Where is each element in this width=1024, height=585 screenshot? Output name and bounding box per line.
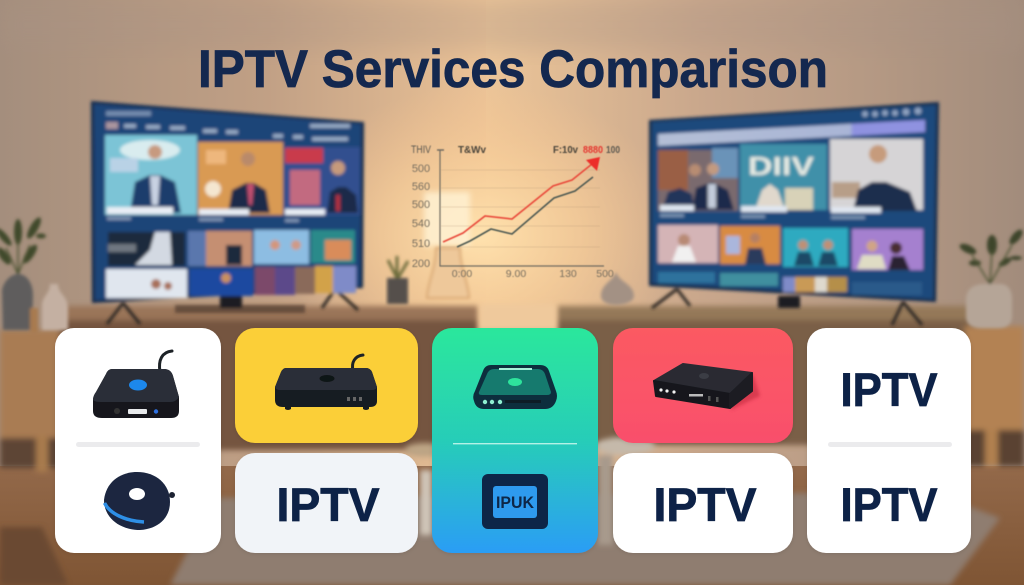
chart x axis labels: 500 bbox=[596, 268, 614, 280]
chart x axis labels: 9.00 bbox=[506, 268, 526, 280]
right plant and vase bbox=[958, 228, 1024, 328]
chart header labels: T&Wv bbox=[458, 144, 486, 156]
tv top icons bbox=[862, 108, 922, 117]
chart y axis labels: 200 bbox=[412, 258, 430, 270]
chart x axis labels: 130 bbox=[559, 268, 577, 280]
chart y axis labels: 500 bbox=[412, 199, 430, 211]
coffee table items bbox=[405, 437, 655, 545]
icon: IPUK logo: IPUK bbox=[496, 493, 535, 512]
icon: IPUK logo bbox=[482, 474, 548, 529]
card 3: green-blue gradient bbox=[432, 328, 598, 553]
chair lower left bbox=[0, 527, 68, 585]
card 5: white with two IPTV logos: IPTV bbox=[840, 363, 938, 416]
tv thumbnail row 2 bbox=[108, 230, 355, 266]
tv menu bar bbox=[106, 111, 350, 141]
tv thumbnail row 1 bbox=[105, 135, 360, 215]
card 2b: IPTV logo bbox=[235, 453, 418, 553]
chart header labels: F:10v bbox=[553, 144, 578, 156]
divider bbox=[453, 443, 577, 444]
chart x axis labels: 0:00 bbox=[452, 268, 472, 280]
center plant bbox=[387, 256, 408, 304]
sideboard right bbox=[557, 306, 1024, 466]
tv screen lettering: DIIV bbox=[748, 151, 815, 181]
chart y axis labels: 500 bbox=[412, 163, 430, 175]
divider bbox=[76, 442, 200, 447]
line chart bbox=[411, 144, 620, 280]
tv thumbnail row 2 bbox=[658, 225, 923, 270]
card 5: white with two IPTV logos: IPTV bbox=[840, 478, 938, 531]
left plant and vases bbox=[0, 216, 68, 333]
tv thumbnail row 3 bbox=[106, 266, 356, 298]
tv thumbnail row 3 bbox=[658, 272, 922, 295]
lamp shade glow bbox=[424, 192, 470, 246]
tv thumbnail row 1 bbox=[658, 139, 923, 211]
dark trend line bbox=[457, 177, 593, 247]
card 2b: IPTV logo: IPTV bbox=[276, 478, 380, 531]
icon: black box with blue dot bbox=[93, 351, 179, 418]
chart header labels: 8880 bbox=[583, 144, 603, 156]
tv: left bbox=[91, 101, 364, 324]
chart header labels bbox=[458, 144, 620, 156]
lamp base bbox=[427, 248, 469, 298]
divider bbox=[828, 442, 952, 447]
tv: right bbox=[649, 102, 939, 325]
icon: round puck device bbox=[104, 472, 175, 530]
icon: black isometric box bbox=[654, 364, 760, 410]
chart x axis labels bbox=[452, 268, 614, 280]
chart gridlines and axes bbox=[437, 150, 604, 266]
card 4b: IPTV logo bbox=[613, 453, 793, 553]
tv captions bbox=[107, 207, 325, 222]
chart y axis labels: THIV bbox=[411, 144, 432, 156]
sideboard left bbox=[0, 306, 478, 472]
chart y axis labels: 540 bbox=[412, 218, 430, 230]
tv search bar bbox=[658, 120, 925, 146]
chart y axis labels bbox=[411, 144, 432, 270]
card 4: red with device bbox=[613, 328, 793, 443]
card 2: yellow with device bbox=[235, 328, 418, 443]
icon: black set top box bbox=[275, 355, 377, 410]
chart header labels: 100 bbox=[606, 144, 620, 156]
card 4b: IPTV logo: IPTV bbox=[654, 478, 757, 531]
card 5: white with two IPTV logos bbox=[807, 328, 971, 553]
center vase bbox=[601, 272, 634, 305]
icon: dark box with green screen bbox=[473, 365, 557, 409]
chart y axis labels: 510 bbox=[412, 238, 430, 250]
red trend line with arrow bbox=[443, 157, 600, 242]
rug bbox=[170, 492, 1000, 585]
chart y axis labels: 560 bbox=[412, 181, 430, 193]
title: IPTV Services Comparison bbox=[198, 40, 828, 99]
card 1: white with two devices bbox=[55, 328, 221, 553]
tv captions bbox=[660, 205, 881, 219]
